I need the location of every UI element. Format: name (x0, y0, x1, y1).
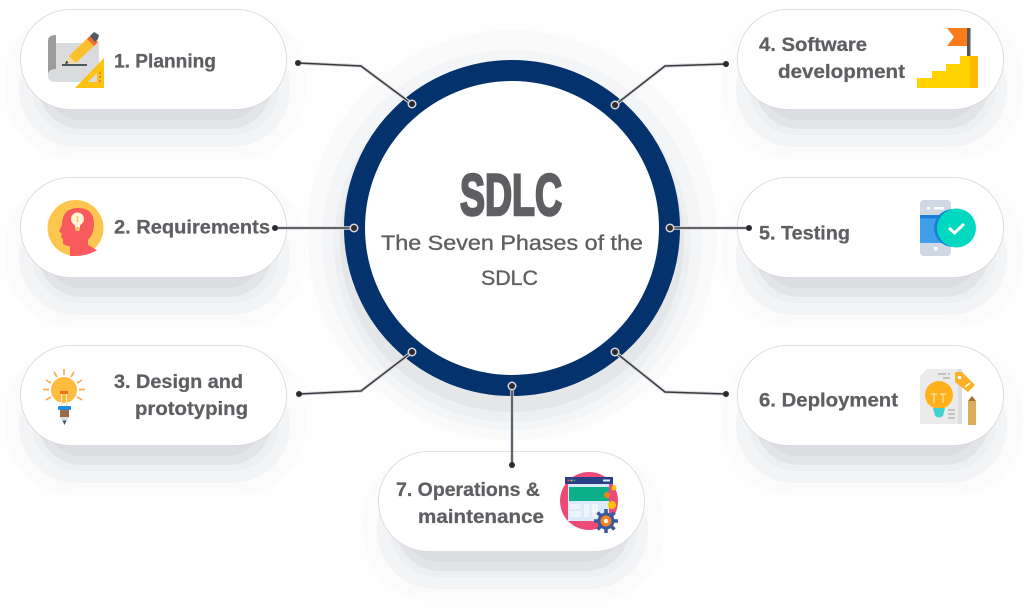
title: SDLC: SDLC (460, 163, 562, 228)
label: 4. Software (759, 35, 867, 56)
icon: document, bulb, tag and pencil (920, 369, 976, 425)
subtitle (381, 232, 643, 290)
panel: 3. Design and prototyping (20, 346, 286, 446)
label: 3. Design and (114, 372, 243, 393)
label: maintenance (418, 507, 544, 528)
label: prototyping (135, 399, 248, 420)
label: 6. Deployment (759, 390, 899, 412)
panel: 6. Deployment (738, 346, 1004, 446)
label (759, 35, 906, 83)
panel: 1. Planning (20, 10, 286, 110)
icon: head with light bulb (48, 200, 104, 256)
subtitle: SDLC (481, 267, 538, 290)
panel: 4. Software development (738, 10, 1004, 110)
panel: 5. Testing (738, 178, 1004, 278)
label: 7. Operations & (396, 480, 540, 501)
central circle (354, 70, 670, 386)
panel: 7. Operations & maintenance (378, 452, 644, 552)
connector: phase 2 (272, 224, 358, 232)
subtitle: The Seven Phases of the (381, 232, 643, 255)
connector: phase 3 (296, 348, 416, 397)
label (396, 480, 544, 528)
label: development (778, 62, 906, 83)
icon: flag on stairs (917, 28, 978, 88)
icon: phone with check mark (920, 200, 976, 256)
icon: blueprint, pencil and set square (48, 32, 104, 88)
label: 5. Testing (759, 224, 850, 244)
label (114, 372, 248, 420)
connector: phase 5 (666, 224, 752, 232)
connector: phase 6 (610, 348, 729, 397)
icon: light bulb pencil (43, 369, 85, 425)
icon: browser window with gear (560, 472, 618, 533)
label: 2. Requirements (114, 218, 270, 238)
connector: phase 1 (295, 60, 416, 108)
label: 1. Planning (114, 52, 216, 72)
connector: phase 4 (610, 61, 729, 110)
panel: 2. Requirements (20, 178, 286, 278)
connector: phase 7 (508, 382, 516, 468)
